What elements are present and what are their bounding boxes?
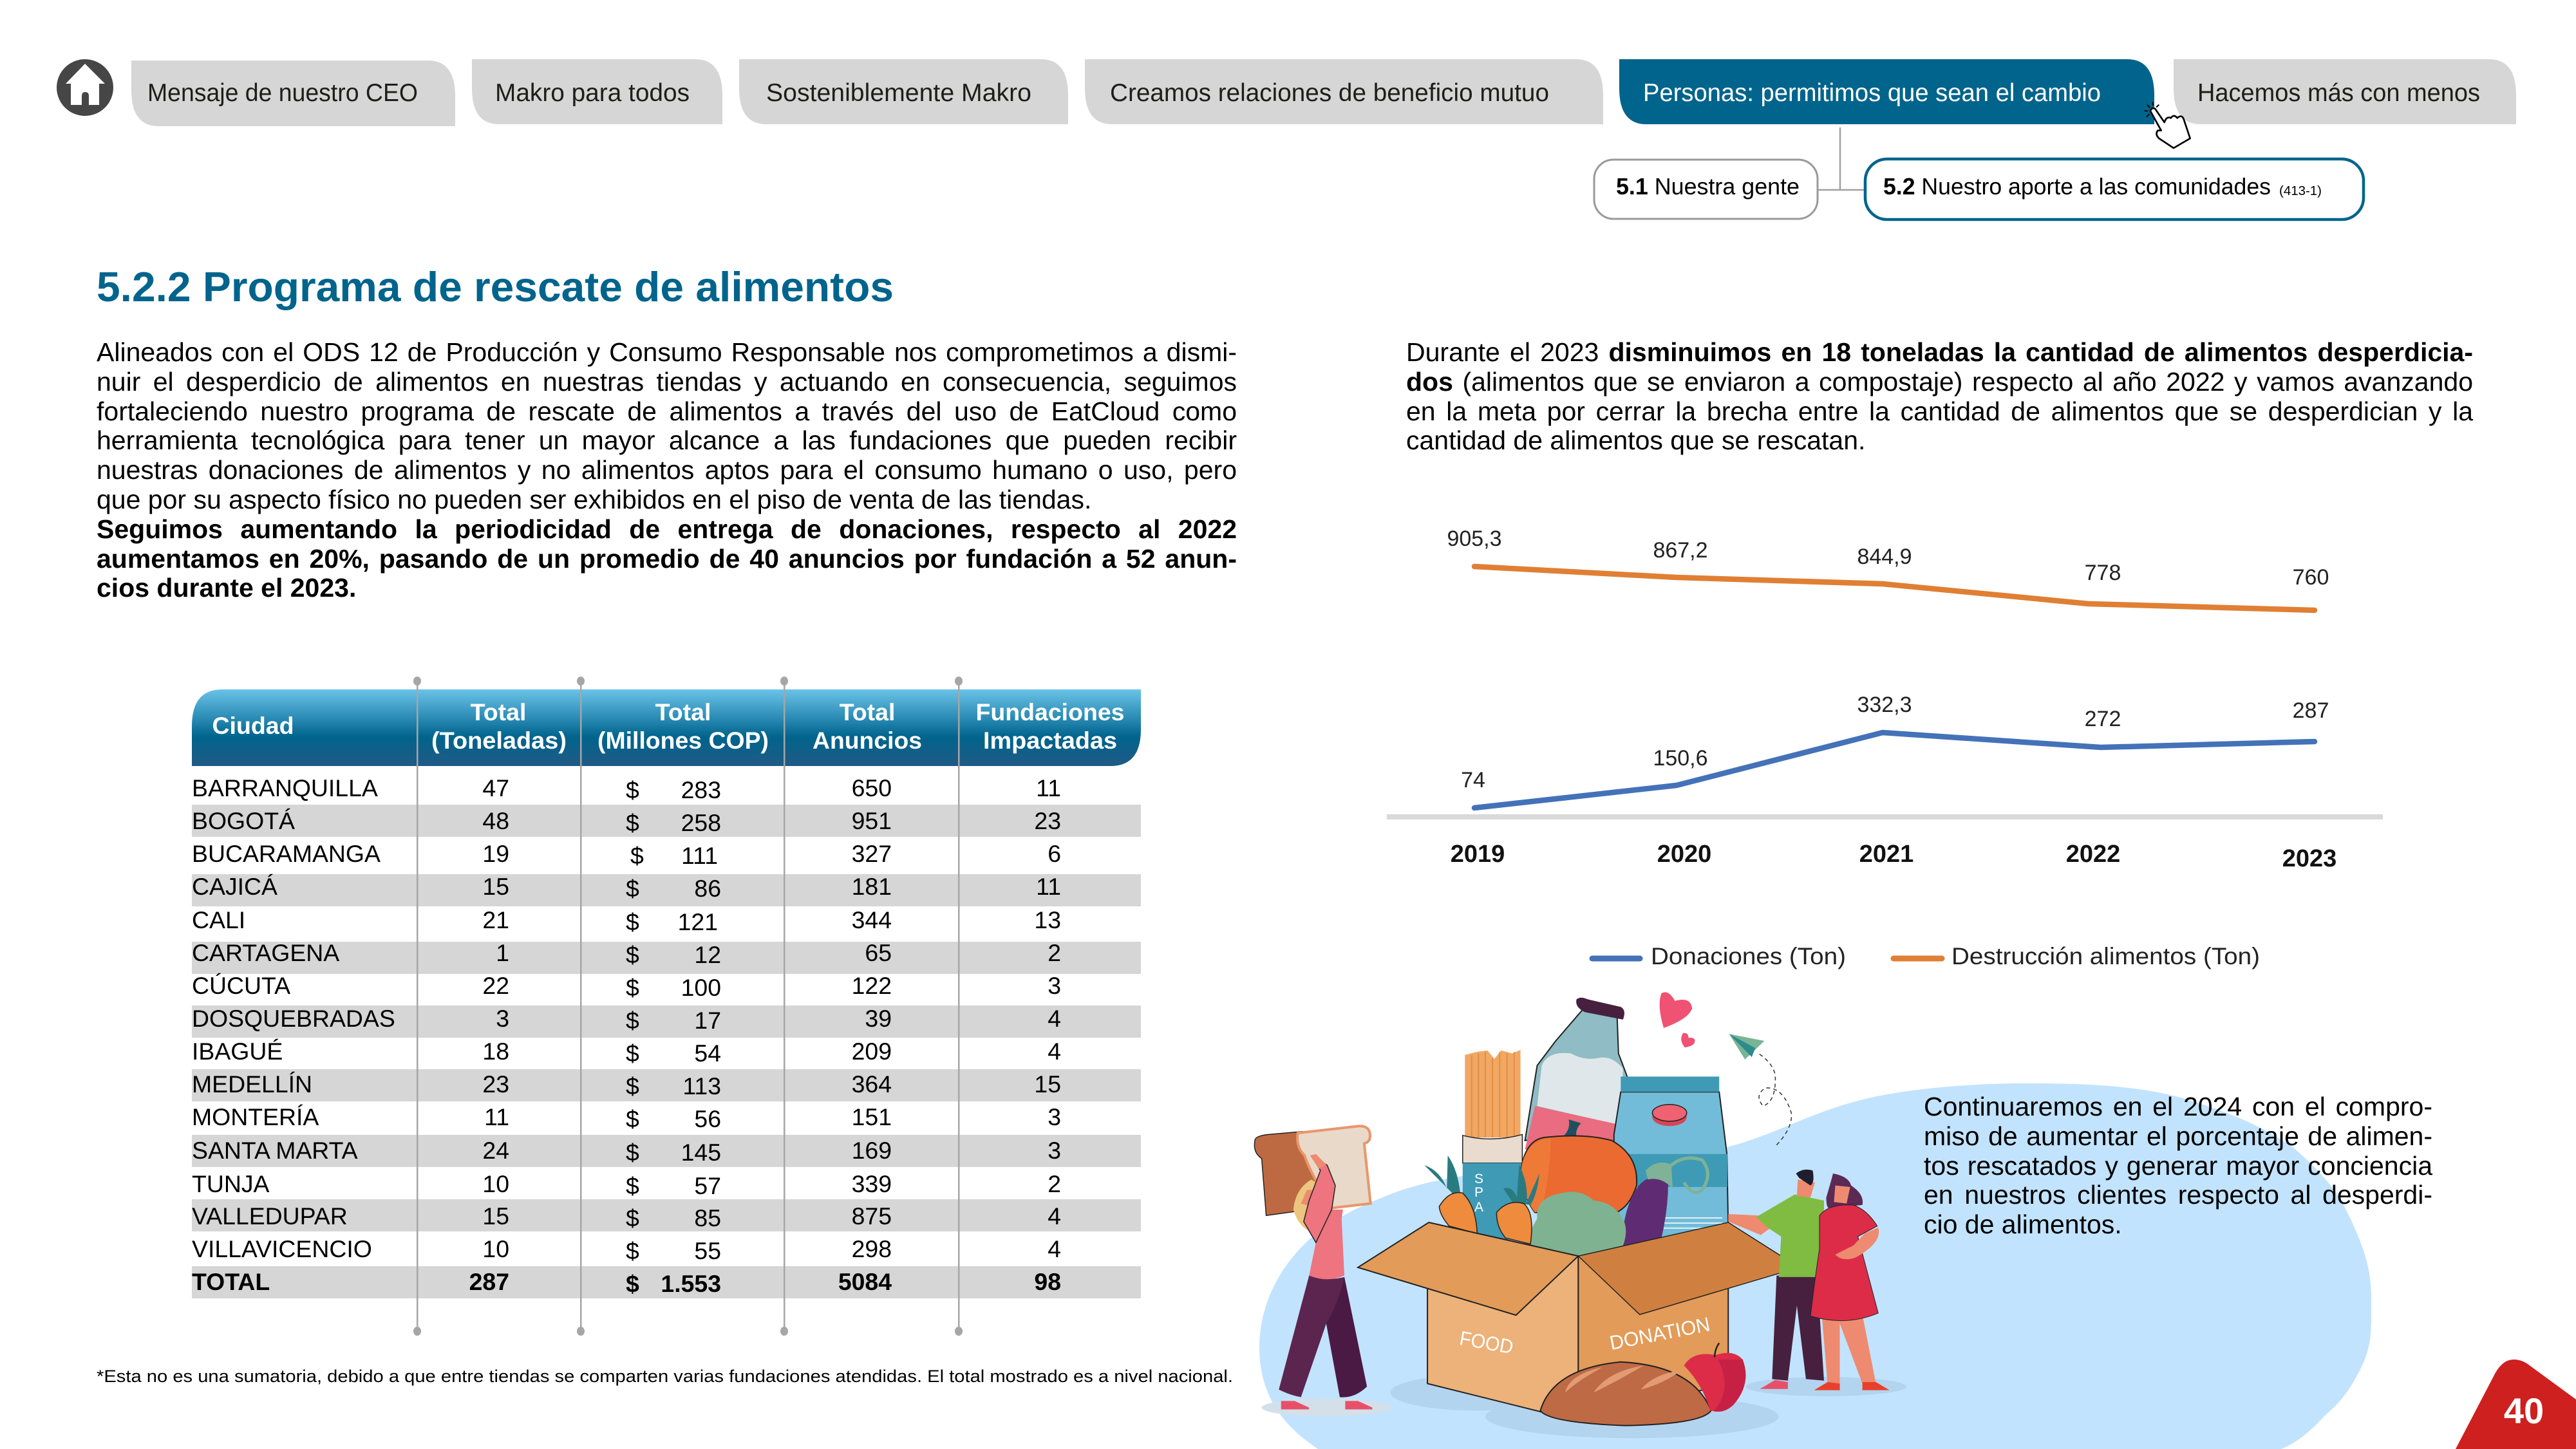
- chart legend: Destrucción alimentos (Ton): [1951, 943, 2260, 969]
- row: Villavicencio: 298: [852, 1235, 892, 1262]
- title: 5.2.2 Programa de rescate de alimentos: [97, 263, 894, 310]
- row: Montería: 11: [484, 1103, 509, 1130]
- line chart: [1387, 527, 2383, 969]
- box label: FOOD: FOOD: [1458, 1327, 1515, 1358]
- person: woman in red dress: [1810, 1173, 1890, 1390]
- eggplant: [1622, 1158, 1707, 1247]
- row: Valledupar: 85: [694, 1204, 721, 1231]
- row: Ibagué: 209: [852, 1038, 892, 1065]
- icon: hearts: [1660, 992, 1695, 1047]
- row: Santa Marta: [192, 1137, 1061, 1166]
- background blob: [1259, 1083, 2371, 1449]
- row: Tunja: 2: [1048, 1170, 1061, 1197]
- row: Cali: 21: [482, 906, 509, 933]
- x-axis year labels: 2022: [2066, 841, 2120, 868]
- table column headings: Total: [840, 698, 895, 725]
- page number tab: 40: [2504, 1390, 2544, 1431]
- row: Bogotá: 23: [1034, 807, 1061, 834]
- row: Bucaramanga: BUCARAMANGA: [192, 840, 381, 867]
- navigation tab: Mensaje de nuestro CEO: Mensaje de nuestro CEO: [147, 79, 418, 107]
- row: Cúcuta: CÚCUTA: [192, 972, 290, 999]
- row: Cajicá: $: [626, 875, 639, 902]
- row: Barranquilla: $: [626, 776, 639, 803]
- row: Cali: 121: [678, 908, 718, 935]
- text block: 2024 commitment: tos rescatados y generar mayor conciencia: [1924, 1151, 2432, 1181]
- row: Total: $: [626, 1270, 639, 1297]
- row: Montería: 151: [852, 1103, 892, 1130]
- row: Dosquebradas: $: [626, 1007, 639, 1034]
- text block: left introduction: Alineados con el ODS 12 de Producción y Consumo Responsable nos comprometimos a dismi-: [97, 337, 1237, 367]
- row: Barranquilla: 47: [482, 774, 509, 801]
- row: Cajicá: 181: [852, 873, 892, 900]
- sub-navigation: 5.2 Nuestro aporte a las comunidades: 5.2 Nuestro aporte a las comunidades: [1883, 173, 2271, 200]
- footnote: *Esta no es una sumatoria, debido a que entre tiendas se comparten varias fundaciones atendidas. El total mostrado es a nivel nacional.: [97, 1367, 1233, 1386]
- data labels: Destrucción alimentos: 867,2: [1653, 538, 1708, 563]
- row: Bucaramanga: 111: [681, 842, 718, 869]
- row: Total: 5084: [838, 1268, 892, 1295]
- sub-navigation: 5.2 Nuestro aporte a las comunidades: (413-1): [2279, 184, 2322, 198]
- column divider lines with end dots: [413, 677, 963, 1336]
- row: Villavicencio: VILLAVICENCIO: [192, 1235, 372, 1262]
- text block: left introduction: que por su aspecto físico no pueden ser exhibidos en el piso de venta de las tiendas.: [97, 485, 1091, 514]
- text block: 2024 commitment: Continuaremos en el 2024 con el compro-: [1924, 1092, 2432, 1121]
- row: Bogotá: 258: [681, 809, 721, 836]
- icon: paper plane with dashed trail: [1729, 1034, 1792, 1145]
- row: Ibagué: [192, 1038, 1061, 1067]
- row: Cajicá: CAJICÁ: [192, 873, 277, 900]
- row: Dosquebradas: DOSQUEBRADAS: [192, 1005, 395, 1032]
- row: Cúcuta: $: [626, 974, 639, 1001]
- row: Ibagué: 4: [1048, 1038, 1061, 1065]
- pasta package label: SPA: [1474, 1172, 1483, 1215]
- sub-navigation: 5.2 Nuestro aporte a las comunidades: [1865, 159, 2364, 220]
- row: Montería: 3: [1048, 1103, 1061, 1130]
- row: Montería: $: [626, 1105, 639, 1132]
- x-axis year labels: [1451, 841, 2336, 872]
- text block: 2024 commitment: cio de alimentos.: [1924, 1210, 2122, 1239]
- chart axis: [1387, 814, 2383, 819]
- table column headings: Fundaciones: [976, 698, 1124, 725]
- row: Cartagena: [192, 939, 1061, 968]
- table column headings: Anuncios: [813, 727, 922, 754]
- table column headings: (Millones COP): [597, 727, 769, 754]
- row: Bucaramanga: $: [630, 842, 644, 869]
- row: Valledupar: 4: [1048, 1202, 1061, 1229]
- row: Dosquebradas: 3: [496, 1005, 509, 1032]
- row: Cartagena: 2: [1048, 939, 1061, 966]
- navigation tab: Sosteniblemente Makro: [739, 59, 1068, 124]
- row: Medellín: $: [626, 1072, 639, 1099]
- data labels: Destrucción alimentos: 760: [2293, 565, 2329, 590]
- text block: left introduction: [97, 337, 1237, 603]
- row: Valledupar: 875: [852, 1202, 892, 1229]
- row: Cartagena: 65: [865, 939, 892, 966]
- row: Cali: 13: [1034, 906, 1061, 933]
- row: Bogotá: 951: [852, 807, 892, 834]
- table: [192, 677, 1141, 1336]
- row: Barranquilla: BARRANQUILLA: [192, 774, 378, 801]
- row: Dosquebradas: 4: [1048, 1005, 1061, 1032]
- row: Bogotá: [192, 807, 1061, 836]
- row: Ibagué: IBAGUÉ: [192, 1038, 283, 1065]
- row: Tunja: TUNJA: [192, 1170, 270, 1197]
- row: Montería: [192, 1103, 1061, 1132]
- data labels: Donaciones: [1461, 693, 2329, 792]
- row: Bucaramanga: 19: [482, 840, 509, 867]
- table column headings: Total: [655, 698, 711, 725]
- data labels: Destrucción alimentos: 778: [2085, 561, 2121, 585]
- data labels: Donaciones: 150,6: [1653, 746, 1708, 771]
- row: Cúcuta: 3: [1048, 972, 1061, 999]
- row: Tunja: 10: [482, 1170, 509, 1197]
- table column headings: (Toneladas): [431, 727, 567, 754]
- row: Cali: [192, 906, 1061, 935]
- person: woman holding bread: [1279, 1154, 1372, 1409]
- row: Total: TOTAL: [192, 1268, 270, 1295]
- juice carton: [1614, 1076, 1728, 1249]
- x-axis year labels: 2020: [1657, 841, 1711, 868]
- row: Dosquebradas: 39: [865, 1005, 892, 1032]
- text block: left introduction: nuir el desperdicio de alimentos en nuestras tiendas y actuando en consecuencia, seguimos: [97, 367, 1237, 397]
- row: Bucaramanga: 6: [1048, 840, 1061, 867]
- chart legend: [1592, 943, 2260, 969]
- row: Santa Marta: 24: [482, 1137, 509, 1164]
- chart legend: Donaciones (Ton): [1651, 943, 1846, 969]
- navigation tab: Hacemos más con menos: Hacemos más con menos: [2197, 79, 2480, 107]
- row: Medellín: MEDELLÍN: [192, 1070, 312, 1098]
- row: Cajicá: 15: [482, 873, 509, 900]
- text block: left introduction: nuestras donaciones de alimentos y no alimentos aptos para el consumo humano o uso, pero: [97, 455, 1237, 485]
- data labels: Donaciones: 272: [2085, 707, 2121, 731]
- ground shadows: [1262, 1374, 1906, 1438]
- row: Santa Marta: SANTA MARTA: [192, 1137, 358, 1164]
- row: Cúcuta: 100: [681, 974, 721, 1001]
- navigation tab: active Personas: Personas: permitimos que sean el cambio: [1643, 79, 2101, 107]
- row: Tunja: 339: [852, 1170, 892, 1197]
- bread loaf: [1540, 1362, 1711, 1426]
- row: Medellín: [192, 1070, 1061, 1099]
- row: Montería: 56: [694, 1105, 721, 1132]
- row: Medellín: 113: [682, 1072, 721, 1099]
- row: Cali: $: [626, 908, 639, 935]
- navigation tab: Mensaje de nuestro CEO: [131, 61, 455, 126]
- row: Medellín: 364: [852, 1070, 892, 1098]
- navigation tab: Hacemos más con menos: [2174, 59, 2516, 124]
- x-axis year labels: 2021: [1859, 841, 1913, 868]
- row: Total: [192, 1268, 1061, 1297]
- row: Cúcuta: [192, 972, 1061, 1001]
- row: Cartagena: $: [626, 941, 639, 968]
- text block: right introduction: cantidad de alimentos que se rescatan.: [1406, 425, 1865, 455]
- row: Santa Marta: 145: [681, 1139, 721, 1166]
- sub-navigation connector: [1818, 127, 1865, 190]
- apple: [1684, 1343, 1745, 1412]
- row: Total: 98: [1034, 1268, 1061, 1295]
- row: Villavicencio: 55: [694, 1237, 721, 1264]
- text block: right introduction: dos (alimentos que se enviaron a compostaje) respecto al año 2022 y vamos avanzando: [1406, 367, 2473, 397]
- row: Barranquilla: 650: [852, 774, 892, 801]
- carrots: [1424, 1155, 1539, 1244]
- row: Dosquebradas: 17: [694, 1007, 721, 1034]
- text block: left introduction: aumentamos en 20%, pasando de un promedio de 40 anuncios por fundación a 52 anun-: [97, 544, 1237, 574]
- text block: 2024 commitment: miso de aumentar el porcentaje de alimen-: [1924, 1121, 2432, 1151]
- pumpkin: [1521, 1119, 1637, 1213]
- milk bottle: [1525, 998, 1628, 1150]
- navigation tab: Makro para todos: Makro para todos: [495, 79, 690, 107]
- data labels: Destrucción alimentos: 905,3: [1447, 527, 1502, 551]
- row: Santa Marta: 3: [1048, 1137, 1061, 1164]
- series line: Donaciones: [1474, 733, 2315, 808]
- navigation tab: Creamos relaciones de beneficio mutuo: [1085, 59, 1603, 124]
- navigation tab: Makro para todos: [472, 59, 722, 124]
- data labels: Destrucción alimentos: [1447, 527, 2329, 590]
- row: Dosquebradas: [192, 1005, 1061, 1034]
- row: Bogotá: BOGOTÁ: [192, 807, 295, 834]
- person: man in green shirt: [1728, 1170, 1824, 1389]
- page number tab: [2456, 1360, 2576, 1449]
- pasta package: [1463, 1050, 1522, 1240]
- row: Bucaramanga: [192, 840, 1061, 869]
- row: Cartagena: CARTAGENA: [192, 939, 339, 966]
- row: Ibagué: $: [626, 1040, 639, 1067]
- row: Villavicencio: 10: [482, 1235, 509, 1262]
- row: Villavicencio: [192, 1235, 1061, 1264]
- row: Cali: CALI: [192, 906, 245, 933]
- sub-navigation: 5.1 Nuestra gente: [1594, 160, 1818, 219]
- navigation tab: active Personas: [1619, 59, 2154, 124]
- row: Cali: 344: [852, 906, 892, 933]
- open cardboard box: [1358, 1222, 1799, 1421]
- row: Medellín: 23: [482, 1070, 509, 1098]
- row: Cúcuta: 22: [482, 972, 509, 999]
- row: Villavicencio: 4: [1048, 1235, 1061, 1262]
- row: Valledupar: 15: [482, 1202, 509, 1229]
- table column headings: [212, 698, 1124, 754]
- table column headings: Ciudad: [212, 712, 294, 739]
- row: Total: 1.553: [661, 1270, 721, 1297]
- row: Cúcuta: 122: [852, 972, 892, 999]
- text block: 2024 commitment: [1924, 1092, 2432, 1239]
- row: Cartagena: 12: [694, 941, 721, 968]
- navigation tab: Creamos relaciones de beneficio mutuo: Creamos relaciones de beneficio mutuo: [1110, 79, 1549, 107]
- data labels: Donaciones: 332,3: [1857, 693, 1912, 717]
- row: Tunja: 57: [694, 1172, 721, 1199]
- row: Tunja: [192, 1170, 1061, 1199]
- row: Bucaramanga: 327: [852, 840, 892, 867]
- row: Cajicá: [192, 873, 1061, 902]
- icon: pointing hand cursor: [2145, 102, 2190, 148]
- text block: left introduction: fortaleciendo nuestro programa de rescate de alimentos a través del uso de EatCloud como: [97, 397, 1237, 426]
- row: Valledupar: VALLEDUPAR: [192, 1202, 348, 1229]
- row: Barranquilla: [192, 774, 1061, 803]
- row: Medellín: 15: [1034, 1070, 1061, 1098]
- navigation: home icon: [57, 59, 113, 116]
- table column headings: Total: [471, 698, 526, 725]
- row: Ibagué: 54: [694, 1040, 721, 1067]
- table header band: [192, 689, 1141, 766]
- row: Ibagué: 18: [482, 1038, 509, 1065]
- table rows: [192, 774, 1061, 1297]
- text block: left introduction: cios durante el 2023.: [97, 573, 356, 603]
- series line: Destrucción alimentos: [1474, 566, 2315, 610]
- row: Santa Marta: 169: [852, 1137, 892, 1164]
- sub-navigation: 5.1 Nuestra gente: 5.1 Nuestra gente: [1616, 173, 1800, 200]
- data labels: Donaciones: 74: [1461, 768, 1485, 792]
- row: Cajicá: 11: [1036, 873, 1061, 900]
- row: Cajicá: 86: [694, 875, 721, 902]
- row: Tunja: $: [626, 1172, 639, 1199]
- row: Barranquilla: 11: [1036, 774, 1061, 801]
- text block: right introduction: en la meta por cerrar la brecha entre la cantidad de alimentos que se desperdician y la: [1406, 397, 2473, 426]
- text block: right introduction: [1406, 337, 2474, 455]
- navigation tab: Sosteniblemente Makro: Sosteniblemente Makro: [766, 79, 1031, 107]
- text block: 2024 commitment: en nuestros clientes respecto al desperdi-: [1924, 1180, 2432, 1210]
- striped rows: [192, 805, 1141, 1298]
- text block: left introduction: herramienta tecnológica para tener un mayor alcance a las fundaciones que pueden recibir: [97, 425, 1237, 455]
- row: Montería: MONTERÍA: [192, 1103, 319, 1130]
- row: Bogotá: 48: [482, 807, 509, 834]
- row: Total: 287: [469, 1268, 509, 1295]
- row: Barranquilla: 283: [681, 776, 721, 803]
- illustration: food donation box with people: [1254, 992, 1906, 1438]
- row: Valledupar: $: [626, 1204, 639, 1231]
- text block: left introduction: Seguimos aumentando la periodicidad de entrega de donaciones, respecto al 2022: [97, 514, 1237, 544]
- row: Villavicencio: $: [626, 1237, 639, 1264]
- text block: right introduction: Durante el 2023 disminuimos en 18 toneladas la cantidad de alimentos desperdicia-: [1406, 337, 2473, 367]
- broccoli: [1523, 1192, 1626, 1256]
- row: Bogotá: $: [626, 809, 639, 836]
- data labels: Destrucción alimentos: 844,9: [1857, 545, 1912, 569]
- bread slice: [1254, 1126, 1371, 1215]
- table column headings: Impactadas: [983, 727, 1117, 754]
- x-axis year labels: 2023: [2282, 845, 2336, 872]
- row: Cartagena: 1: [496, 939, 509, 966]
- data labels: Donaciones: 287: [2293, 698, 2329, 723]
- row: Santa Marta: $: [626, 1139, 639, 1166]
- x-axis year labels: 2019: [1451, 841, 1505, 868]
- box label: DONATION: DONATION: [1608, 1313, 1712, 1354]
- row: Valledupar: [192, 1202, 1061, 1231]
